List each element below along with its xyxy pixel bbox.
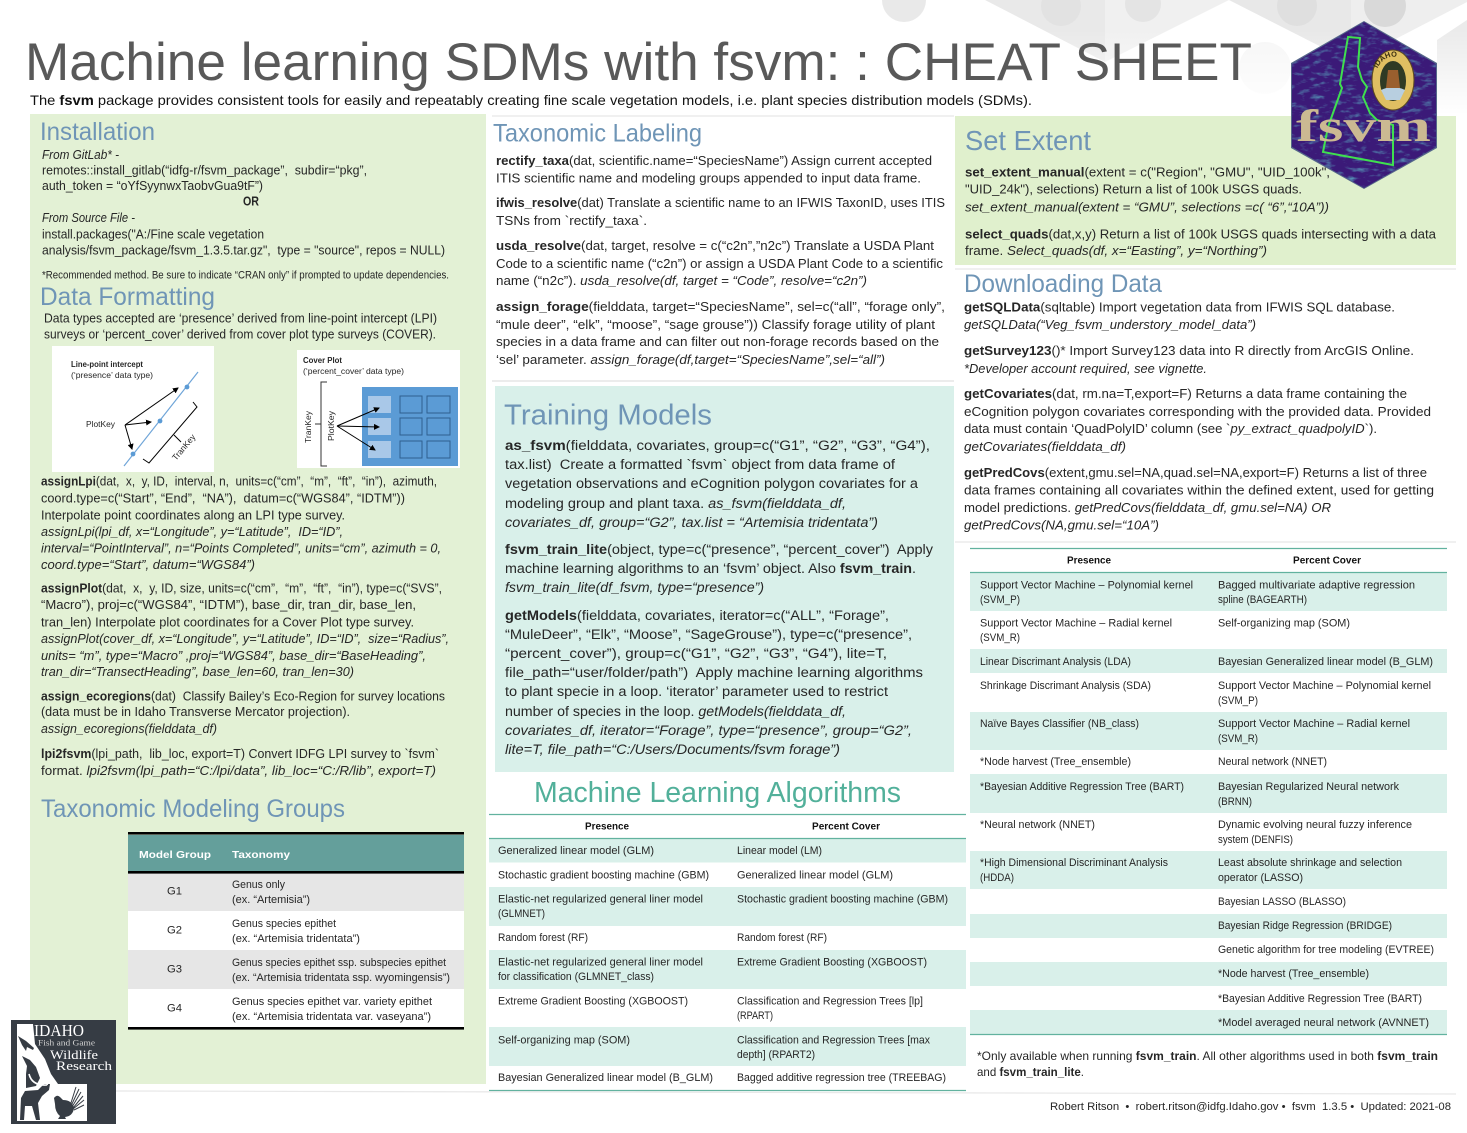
section: taxonomic modeling groups xyxy=(41,795,464,1030)
heading: Taxonomic Labeling: Taxonomic Labeling xyxy=(493,120,702,148)
section: data formatting: surveys or ‘percent_cover’ derived from cover plot type surveys (COVER). xyxy=(44,327,436,341)
table: machine learning algorithms continued: (HDDA) xyxy=(980,872,1014,884)
table: machine learning algorithms continued: Support Vector Machine – Polynomial kernel xyxy=(980,579,1193,591)
section: installation: analysis/fsvm_package/fsvm_1.3.5.tar.gz", type = "source", repos = NULL) xyxy=(42,243,445,257)
table: taxonomic modeling groups: G1 xyxy=(167,886,182,898)
table: machine learning algorithms continued: Bayesian Ridge Regression (BRIDGE) xyxy=(1218,920,1392,932)
function: as_fsvm xyxy=(505,438,930,530)
table: taxonomic modeling groups: Taxonomy xyxy=(232,849,290,861)
function: ifwis_resolve: ifwis_resolve(dat) Translate a scientific name to an IFWIS TaxonID, uses ITIS xyxy=(496,196,945,210)
function: assign_forage: ‘sel’ parameter. assign_forage(df,target=“SpeciesName”,sel=“all”) xyxy=(496,353,885,367)
heading: Training Models: Training Models xyxy=(504,399,712,431)
function: getModels: getModels (fielddata, covariates, iterator=c(“ALL”, “Forage”, xyxy=(505,608,889,623)
function: getModels: number of species in the loop. getModels(fielddata_df, xyxy=(505,704,846,719)
table: machine learning algorithms continued: Self-organizing map (SOM) xyxy=(1218,617,1350,629)
section: installation xyxy=(40,118,449,281)
function: getCovariates xyxy=(964,387,1431,454)
diagram: cover plot: Cover Plot xyxy=(303,356,342,365)
logo: Idaho Fish and Game Wildlife Research: Wildlife xyxy=(50,1048,99,1062)
function: assign_forage: assign_forage (fielddata, target=“SpeciesName”, sel=c(“all”, “forage only”, xyxy=(496,300,945,314)
table: taxonomic modeling groups: (ex. “Artemisia tridentata var. vaseyana”) xyxy=(232,1011,431,1023)
table: taxonomic modeling groups: Genus species epithet var. variety epithet xyxy=(232,996,432,1008)
heading: Data Formatting: Data Formatting xyxy=(40,283,215,311)
panel: left column xyxy=(30,114,486,1084)
function: assignLpi: assignLpi(dat, x, y, ID, interval, n, units=c(“cm”, “m”, “ft”, “in”), azimuth, xyxy=(41,474,437,488)
table: taxonomic modeling groups: (ex. “Artemisia tridentata ssp. wyomingensis”) xyxy=(232,972,450,984)
function: getModels: “MuleDeer”, “Elk”, “Moose”, “SageGrouse”), type=c(“presence”, xyxy=(505,627,912,642)
section: installation: *Recommended method. Be sure to indicate “CRAN only” if prompted to update dependencies. xyxy=(42,269,449,281)
function: set_extent_manual: set_extent_manual (extent = c("Region", "GMU", "UID_100k", xyxy=(965,166,1330,180)
function: lpi2fsvm: format. lpi2fsvm(lpi_path=“C:/lpi/data”, lib_loc=“C:/R/lib”, export=T) xyxy=(41,764,436,778)
seal: Idaho Fish and Game: IDAHO xyxy=(1373,52,1397,68)
function: usda_resolve: Code to a scientific name (“c2n”) or assign a USDA Plant Code to a scientific xyxy=(496,257,943,271)
table: machine learning algorithms: Stochastic gradient boosting machine (GBM) xyxy=(498,869,709,881)
function: ifwis_resolve xyxy=(496,196,945,228)
table: taxonomic modeling groups: G2 xyxy=(167,925,182,937)
section: installation: OR xyxy=(243,195,259,209)
function: set_extent_manual: set_extent_manual(extent = “GMU”, selections =c( “6”,“10A”)) xyxy=(965,201,1329,215)
function: getModels: lite=T, file_path=“C:/Users/Documents/fsvm forage”) xyxy=(505,742,840,757)
function: fsvm_train_lite: machine learning algorithms to an ‘fsvm’ object. Also fsvm_train . xyxy=(505,561,916,576)
function: getPredCovs: data frames containing all covariates within the defined extent, used for getting xyxy=(964,483,1434,497)
function: assign_ecoregions: assign_ecoregions(dat) Classify Bailey’s Eco-Region for survey locations xyxy=(41,689,445,703)
table: machine learning algorithms continued: operator (LASSO) xyxy=(1218,872,1303,884)
table: machine learning algorithms: (RPART) xyxy=(737,1010,773,1022)
logo: fsvm hex sticker xyxy=(1291,21,1437,189)
table: machine learning algorithms continued: (SVM_P) xyxy=(980,594,1020,606)
function: assignPlot: units= “m”, type=“Macro” ,proj=“WGS84”, base_dir=“BaseHeading”, xyxy=(41,649,426,663)
table: machine learning algorithms: Generalized linear model (GLM) xyxy=(498,845,654,857)
table: taxonomic modeling groups: Genus species epithet ssp. subspecies epithet xyxy=(232,957,446,969)
table: machine learning algorithms continued: *Neural network (NNET) xyxy=(980,819,1095,831)
function: getCovariates: getCovariates (dat, rm.na=T,export=F) Returns a data frame containing the xyxy=(964,387,1407,401)
function: rectify_taxa: rectify_taxa(dat, scientific.name=“SpeciesName”) Assign current accepted xyxy=(496,154,932,168)
heading: Taxonomic Modeling Groups: Taxonomic Modeling Groups xyxy=(41,795,345,823)
table: machine learning algorithms continued: (SVM_R) xyxy=(1218,733,1258,745)
function: lpi2fsvm xyxy=(41,747,439,778)
function: getPredCovs: getPredCovs(NA,gmu.sel=“10A”) xyxy=(964,518,1159,532)
function: getPredCovs: getPredCovs(extent,gmu.sel=NA,quad.sel=NA,export=F) Returns a list of three xyxy=(964,466,1427,480)
footer credit: Robert Ritson • robert.ritson@idfg.Idaho.gov • fsvm 1.3.5 • Updated: 2021-08 xyxy=(1050,1101,1451,1113)
subtitle: The fsvm package provides consistent tools for easily and repeatably creating fine scale vegetation models, i.e. plant species distribution models (SDMs). xyxy=(30,92,1032,108)
seal: Idaho Fish and Game xyxy=(1372,50,1414,110)
diagram: cover plot: (‘percent_cover’ data type) xyxy=(303,367,404,376)
panel: downloading data xyxy=(955,270,1456,542)
section: installation: auth_token = “oYfSyynwxTaobvGua9tF”) xyxy=(42,179,263,193)
table: taxonomic modeling groups: Genus only xyxy=(232,879,286,891)
table: machine learning algorithms: Generalized linear model (GLM) xyxy=(737,869,893,881)
diagram: line-point intercept xyxy=(52,346,214,472)
function: rectify_taxa: ITIS scientific name and modeling groups appended to input data frame. xyxy=(496,171,921,185)
section: installation: remotes::install_gitlab(“idfg-r/fsvm_package”, subdir=“pkg”, xyxy=(42,164,367,178)
table: machine learning algorithms continued: Shrinkage Discrimant Analysis (SDA) xyxy=(980,680,1151,692)
logo: Idaho Fish and Game Wildlife Research xyxy=(11,1020,116,1124)
function: assignLpi: Interpolate point coordinates along an LPI type survey. xyxy=(41,508,345,522)
table: machine learning algorithms: Random forest (RF) xyxy=(498,932,588,944)
function: getCovariates: getCovariates(fielddata_df) xyxy=(964,440,1126,454)
panel: taxonomic labeling xyxy=(492,116,954,381)
heading: Downloading Data: Downloading Data xyxy=(964,270,1162,298)
diagram: line-point intercept: Line-point intercept xyxy=(71,360,143,369)
function: usda_resolve: usda_resolve (dat, target, resolve = c(“c2n”,”n2c”) Translate a USDA Plant xyxy=(496,239,935,253)
function: assignPlot: assignPlot(cover_df, x=“Longitude”, y=“Latitude”, ID=“ID”, size=“Radius”, xyxy=(41,632,449,646)
section: installation: From Source File - xyxy=(42,211,135,225)
logo: fsvm hex sticker: fsvm xyxy=(1296,100,1431,151)
table: machine learning algorithms: for classification (GLMNET_class) xyxy=(498,971,654,983)
function: usda_resolve: name (“n2c”). usda_resolve(df, target = “Code”, resolve=“c2n”) xyxy=(496,274,867,288)
table: machine learning algorithms continued: system (DENFIS) xyxy=(1218,834,1293,846)
table: machine learning algorithms: Bagged additive regression tree (TREEBAG) xyxy=(737,1072,946,1084)
diagram: cover plot: TranKey xyxy=(303,410,313,443)
table: machine learning algorithms continued: (SVM_P) xyxy=(1218,695,1258,707)
table: machine learning algorithms continued: Support Vector Machine – Radial kernel xyxy=(980,617,1172,629)
table: machine learning algorithms: Linear model (LM) xyxy=(737,845,822,857)
footnote xyxy=(977,1050,1438,1079)
function: assignPlot xyxy=(41,581,449,679)
table: taxonomic modeling groups: G4 xyxy=(167,1003,182,1015)
table: machine learning algorithms: Random forest (RF) xyxy=(737,932,827,944)
table: machine learning algorithms continued: Support Vector Machine – Polynomial kernel xyxy=(1218,680,1431,692)
function: ifwis_resolve: TSNs from `rectify_taxa`. xyxy=(496,214,647,228)
heading: Installation: Installation xyxy=(40,118,155,146)
section: installation: install.packages("A:/Fine scale vegetation xyxy=(42,227,264,241)
function: assignLpi: interval=“PointInterval”, n=“Points Completed”, units=“cm”, azimuth = 0, xyxy=(41,541,441,555)
function: set_extent_manual: "UID_24k"), selections) Return a list of 100k USGS quads. xyxy=(965,182,1302,196)
panel: training models xyxy=(495,386,954,772)
function: getSurvey123: getSurvey123 ()* Import Survey123 data into R directly from ArcGIS Online. xyxy=(964,344,1414,358)
table: taxonomic modeling groups xyxy=(128,832,464,1030)
table: machine learning algorithms continued: Genetic algorithm for tree modeling (EVTREE) xyxy=(1218,944,1434,956)
table: machine learning algorithms: Extreme Gradient Boosting (XGBOOST) xyxy=(498,995,688,1007)
function: getPredCovs xyxy=(964,466,1434,532)
function: select_quads xyxy=(965,227,1436,258)
function: assignPlot: tran_len) Interpolate plot coordinates for a Cover Plot type survey. xyxy=(41,615,414,629)
table: machine learning algorithms continued: *Bayesian Additive Regression Tree (BART) xyxy=(1218,993,1422,1005)
table: machine learning algorithms continued: *Bayesian Additive Regression Tree (BART) xyxy=(980,781,1184,793)
table: machine learning algorithms: Bayesian Generalized linear model (B_GLM) xyxy=(498,1072,713,1084)
table: machine learning algorithms: Stochastic gradient boosting machine (GBM) xyxy=(737,893,948,905)
logo: Idaho Fish and Game Wildlife Research: IDAHO xyxy=(34,1021,84,1040)
function: as_fsvm: modeling group and plant taxa. as_fsvm(fielddata_df, xyxy=(505,496,846,511)
function: getModels: “percent_cover”), group=c(“G1”, “G2”, “G3”, “G4”), lite=T, xyxy=(505,646,887,661)
function: select_quads: select_quads (dat,x,y) Return a list of 100k USGS quads intersecting with a data xyxy=(965,227,1436,241)
panel: set extent xyxy=(955,116,1456,265)
table: machine learning algorithms continued: Percent Cover xyxy=(1293,556,1361,566)
function: assign_forage: “mule deer”, “elk”, “moose”, “sage grouse”)) Classify forage utility of plant xyxy=(496,318,936,332)
function: assign_ecoregions xyxy=(41,689,445,736)
section: data formatting: Data types accepted are ‘presence’ derived from line-point intercept (LPI) xyxy=(44,311,437,325)
function: as_fsvm: tax.list) Create a formatted `fsvm` object from data frame of xyxy=(505,457,895,472)
function: getModels: file_path=“user/folder/path”) Apply machine learning algorithms xyxy=(505,665,923,680)
table: machine learning algorithms continued: *Model averaged neural network (AVNNET) xyxy=(1218,1017,1429,1029)
diagram: cover plot: PlotKey xyxy=(326,410,336,441)
function: set_extent_manual xyxy=(965,166,1330,215)
diagram: line-point intercept: PlotKey xyxy=(86,419,116,429)
function: assignPlot: tran_dir=“TransectHeading”, base_len=60, tran_len=30) xyxy=(41,665,354,679)
table: machine learning algorithms continued xyxy=(970,548,1447,1034)
function: getCovariates: data must contain ‘QuadPolyID’ column (see ` py_extract_quadpolyID `). xyxy=(964,422,1377,436)
function: assign_forage xyxy=(496,300,945,367)
section: data formatting xyxy=(40,283,460,778)
footnote: *Only available when running fsvm_train. All other algorithms used in both fsvm_train xyxy=(977,1050,1438,1063)
logo: Idaho Fish and Game Wildlife Research: Fish and Game xyxy=(38,1038,96,1048)
function: assignLpi: coord.type=c(“Start”, “End”, “NA”), datum=c(“WGS84”, “IDTM”)) xyxy=(41,491,405,505)
table: machine learning algorithms: Classification and Regression Trees [max xyxy=(737,1034,931,1046)
function: getCovariates: eCognition polygon covariates corresponding with the provided data. Provided xyxy=(964,405,1431,419)
heading: Set Extent: Set Extent xyxy=(965,125,1091,156)
table: machine learning algorithms: Elastic-net regularized general liner model xyxy=(498,956,703,968)
table: machine learning algorithms continued: Naïve Bayes Classifier (NB_class) xyxy=(980,718,1139,730)
table: machine learning algorithms continued: *Node harvest (Tree_ensemble) xyxy=(980,756,1131,768)
diagram: line-point intercept: TranKey xyxy=(170,432,198,462)
function: usda_resolve xyxy=(496,239,943,288)
function: getSurvey123: *Developer account required, see vignette. xyxy=(964,362,1207,376)
title: Machine learning SDMs with fsvm: : CHEAT SHEET xyxy=(25,33,1252,92)
function: assign_ecoregions: assign_ecoregions(fielddata_df) xyxy=(41,722,217,736)
function: getSQLData xyxy=(964,301,1395,332)
table: machine learning algorithms: Extreme Gradient Boosting (XGBOOST) xyxy=(737,956,927,968)
table: machine learning algorithms: Self-organizing map (SOM) xyxy=(498,1034,630,1046)
table: machine learning algorithms: depth] (RPART2) xyxy=(737,1049,815,1061)
table: taxonomic modeling groups: Genus species epithet xyxy=(232,918,336,930)
function: fsvm_train_lite xyxy=(505,542,933,595)
diagram: cover plot xyxy=(297,350,460,468)
table: machine learning algorithms continued: Linear Discrimant Analysis (LDA) xyxy=(980,656,1131,668)
heading: Machine Learning Algorithms: Machine Learning Algorithms xyxy=(534,777,901,809)
function: as_fsvm: covariates_df, group=“G2”, tax.list = “Artemisia tridentata”) xyxy=(505,515,878,530)
decorative header background xyxy=(870,0,1467,115)
logo: Idaho Fish and Game Wildlife Research: Research xyxy=(56,1059,113,1073)
function: getSQLData: getSQLData(“Veg_fsvm_understory_model_data”) xyxy=(964,318,1256,332)
table: machine learning algorithms continued: *High Dimensional Discriminant Analysis xyxy=(980,857,1169,869)
table: machine learning algorithms continued: Least absolute shrinkage and selection xyxy=(1218,857,1402,869)
table: machine learning algorithms continued: Neural network (NNET) xyxy=(1218,756,1327,768)
table: machine learning algorithms: Presence xyxy=(585,822,629,832)
function: assignPlot: “Macro”), proj=c(“WGS84”, “IDTM”), base_dir, tran_dir, base_len, xyxy=(41,598,416,612)
table: machine learning algorithms: Percent Cover xyxy=(812,822,880,832)
table: machine learning algorithms: Classification and Regression Trees [lp] xyxy=(737,995,923,1007)
table: taxonomic modeling groups: (ex. “Artemisia tridentata”) xyxy=(232,933,360,945)
section: installation: From GitLab* - xyxy=(42,148,119,162)
table: machine learning algorithms continued: *Node harvest (Tree_ensemble) xyxy=(1218,968,1369,980)
footnote: and fsvm_train_lite. xyxy=(977,1066,1084,1079)
table: machine learning algorithms: (GLMNET) xyxy=(498,908,545,920)
function: getModels: to plant specie in a loop. ‘iterator’ parameter used to restrict xyxy=(505,684,888,699)
table: machine learning algorithms continued: (BRNN) xyxy=(1218,796,1252,808)
function: getModels: covariates_df, iterator=“Forage”, type=“presence”, group=“G2”, xyxy=(505,723,912,738)
table: machine learning algorithms continued: Bayesian Regularized Neural network xyxy=(1218,781,1400,793)
table: machine learning algorithms continued: (SVM_R) xyxy=(980,632,1020,644)
table: machine learning algorithms continued: Bayesian LASSO (BLASSO) xyxy=(1218,896,1346,908)
function: fsvm_train_lite: fsvm_train_lite(df_fsvm, type=“presence”) xyxy=(505,580,764,595)
function: assignLpi: assignLpi(lpi_df, x=“Longitude”, y=“Latitude”, ID=“ID”, xyxy=(41,525,343,539)
function: as_fsvm: as_fsvm (fielddata, covariates, group=c(“G1”, “G2”, “G3”, “G4”), xyxy=(505,438,930,453)
Idaho state outline xyxy=(1323,37,1393,165)
function: getSQLData: getSQLData (sqltable) Import vegetation data from IFWIS SQL database. xyxy=(964,301,1395,315)
table: machine learning algorithms continued: Bagged multivariate adaptive regression xyxy=(1218,579,1415,591)
table: machine learning algorithms continued: Presence xyxy=(1067,556,1111,566)
table: machine learning algorithms xyxy=(489,814,966,1090)
function: getPredCovs: model predictions. getPredCovs(fielddata_df, gmu.sel=NA) OR xyxy=(964,501,1331,515)
table: taxonomic modeling groups: Model Group xyxy=(139,849,211,861)
table: machine learning algorithms continued: spline (BAGEARTH) xyxy=(1218,594,1307,606)
function: lpi2fsvm: lpi2fsvm(lpi_path, lib_loc, export=T) Convert IDFG LPI survey to `fsvm` xyxy=(41,747,439,761)
function: assignLpi xyxy=(41,474,441,572)
table: taxonomic modeling groups: (ex. “Artemisia”) xyxy=(232,894,310,906)
function: getModels xyxy=(505,608,923,757)
function: as_fsvm: vegetation observations and eCognition polygon covariates for a xyxy=(505,476,919,491)
table: machine learning algorithms continued: Bayesian Generalized linear model (B_GLM) xyxy=(1218,656,1433,668)
function: getSurvey123 xyxy=(964,344,1414,376)
function: fsvm_train_lite: fsvm_train_lite (object, type=c(“presence”, “percent_cover”) Apply xyxy=(505,542,933,557)
function: select_quads: frame. Select_quads(df, x=“Easting”, y=“Northing”) xyxy=(965,244,1267,258)
table: taxonomic modeling groups: G3 xyxy=(167,964,182,976)
function: assignLpi: coord.type=“Start”, datum=“WGS84”) xyxy=(41,558,255,572)
table: machine learning algorithms continued: Dynamic evolving neural fuzzy inference xyxy=(1218,819,1412,831)
table: machine learning algorithms: Elastic-net regularized general liner model xyxy=(498,893,703,905)
function: assignPlot: assignPlot(dat, x, y, ID, size, units=c(“cm”, “m”, “ft”, “in”), type=c(“SVS”, xyxy=(41,581,442,595)
diagram: line-point intercept: (‘presence’ data type) xyxy=(71,371,153,380)
table: machine learning algorithms continued: Support Vector Machine – Radial kernel xyxy=(1218,718,1410,730)
function: assign_forage: species in a data frame and can filter out non-forage records based on the xyxy=(496,335,939,349)
function: assign_ecoregions: (data must be in Idaho Transverse Mercator projection). xyxy=(41,705,350,719)
function: rectify_taxa xyxy=(496,154,932,185)
